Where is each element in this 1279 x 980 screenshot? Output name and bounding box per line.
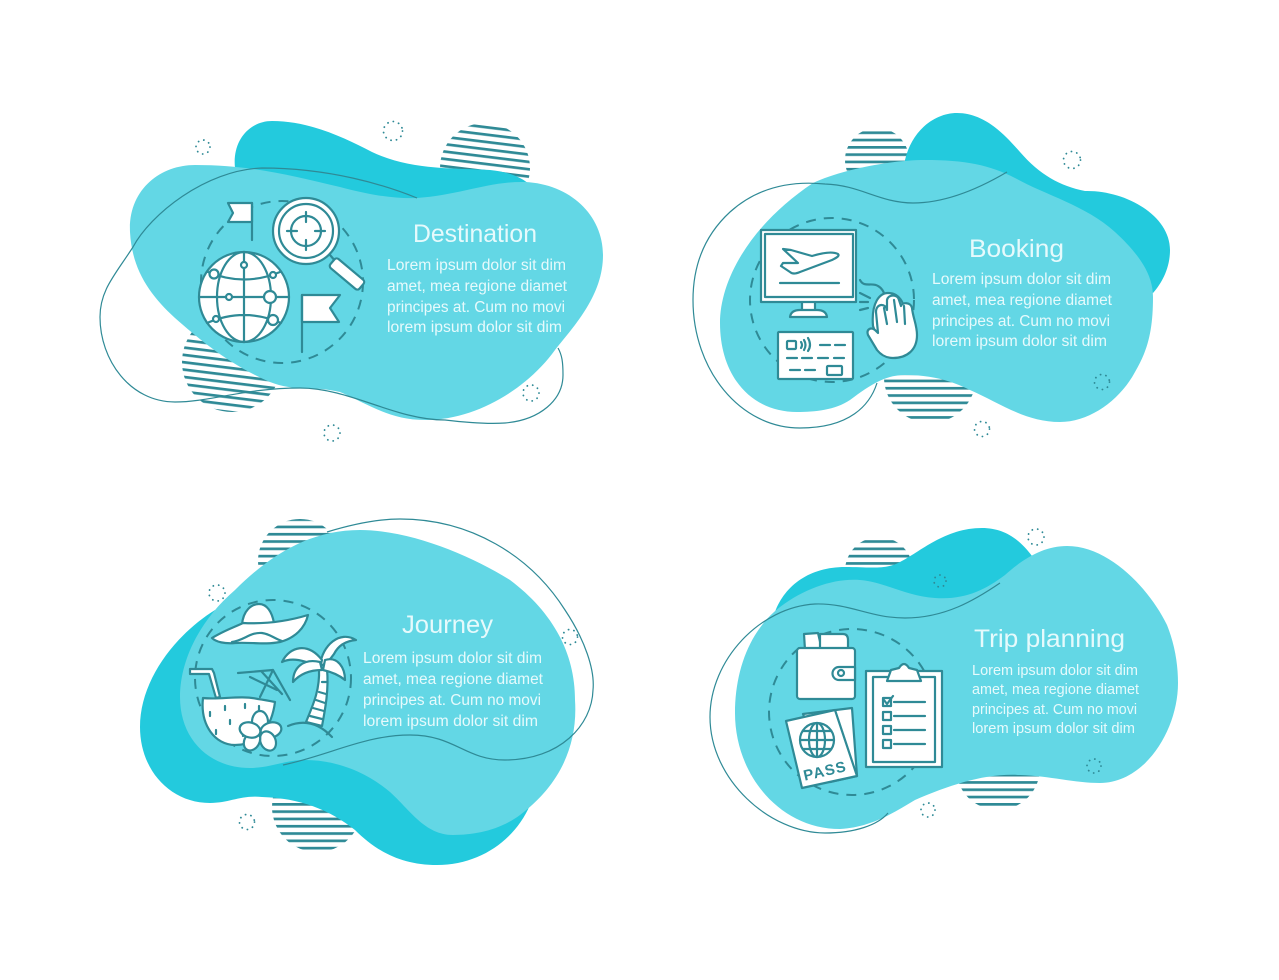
- text block: Lorem ipsum dolor sit dim: [932, 271, 1111, 288]
- striped circle bottom: [956, 726, 1040, 810]
- dotted rings: [209, 585, 578, 830]
- striped circle top: [845, 128, 909, 192]
- text block: principes at. Cum no movi: [363, 692, 541, 709]
- panel: trip planning: [710, 528, 1178, 833]
- text block: Lorem ipsum dolor sit dim: [972, 663, 1138, 679]
- light blob: [180, 530, 575, 835]
- text block: amet, mea regione diamet: [972, 682, 1139, 698]
- text block: amet, mea regione diamet: [387, 278, 568, 295]
- thin curve: [100, 168, 563, 423]
- icon: sun hat: [212, 604, 308, 643]
- light blob: [735, 546, 1178, 829]
- thin curve: [693, 172, 1007, 428]
- heading: Destination: Destination: [413, 220, 537, 248]
- text block: amet, mea regione diamet: [932, 292, 1113, 309]
- dashed icon circle: [195, 600, 351, 756]
- dark blob: [775, 528, 1032, 625]
- text block: lorem ipsum dolor sit dim: [932, 333, 1107, 350]
- striped circle bottom: [884, 331, 976, 423]
- text block: principes at. Cum no movi: [387, 299, 565, 316]
- icon: cocktail coconut: [190, 669, 290, 745]
- heading: Booking: Booking: [969, 235, 1064, 263]
- icon: globe: [199, 252, 289, 342]
- striped circle bottom: [272, 762, 362, 852]
- text block: lorem ipsum dolor sit dim: [387, 319, 562, 336]
- dashed icon circle: [201, 201, 363, 363]
- icon: flower: [238, 711, 283, 753]
- dashed icon circle: [769, 629, 935, 795]
- thin curve: [283, 519, 593, 765]
- striped circle top: [440, 123, 530, 213]
- dotted rings: [196, 122, 539, 441]
- text block: [972, 663, 1139, 737]
- icon: large flag: [302, 295, 340, 352]
- icon: wallet: [797, 633, 855, 699]
- panel: destination: [100, 121, 603, 441]
- panel: booking: [693, 113, 1170, 436]
- text block: amet, mea regione diamet: [363, 671, 544, 688]
- icon: mouse and hand: [860, 280, 917, 358]
- icon: palm tree: [282, 637, 356, 737]
- text block: principes at. Cum no movi: [972, 702, 1137, 718]
- striped circle top: [258, 519, 342, 603]
- dark blob: [235, 121, 535, 230]
- heading: Trip planning: Trip planning: [974, 625, 1125, 653]
- text block: lorem ipsum dolor sit dim: [972, 721, 1135, 737]
- text block: principes at. Cum no movi: [932, 313, 1110, 330]
- icon: magnifier: [273, 198, 365, 291]
- dotted rings: [921, 529, 1101, 817]
- striped circle bottom: [182, 312, 282, 412]
- dark blob: [905, 113, 1170, 293]
- icon: bank card: [778, 332, 853, 379]
- text block: Lorem ipsum dolor sit dim: [387, 257, 566, 274]
- icon: small flag: [228, 203, 252, 240]
- dotted rings: [974, 152, 1110, 436]
- text block: lorem ipsum dolor sit dim: [363, 713, 538, 730]
- panel: journey: [140, 519, 593, 865]
- light blob: [720, 160, 1153, 422]
- icon: passport: [786, 708, 857, 788]
- thin curve: [710, 583, 1000, 833]
- label: PASS: PASS: [802, 758, 848, 785]
- text block: Lorem ipsum dolor sit dim: [363, 650, 542, 667]
- dark blob: [140, 610, 530, 865]
- light blob: [130, 165, 603, 420]
- text block: [363, 650, 544, 730]
- striped circle top: [845, 537, 913, 605]
- text block: [387, 257, 568, 336]
- dashed icon circle: [750, 218, 914, 382]
- text block: [932, 271, 1113, 350]
- icon: clipboard: [866, 664, 942, 767]
- heading: Journey: Journey: [402, 611, 493, 639]
- icon: monitor: [761, 230, 856, 317]
